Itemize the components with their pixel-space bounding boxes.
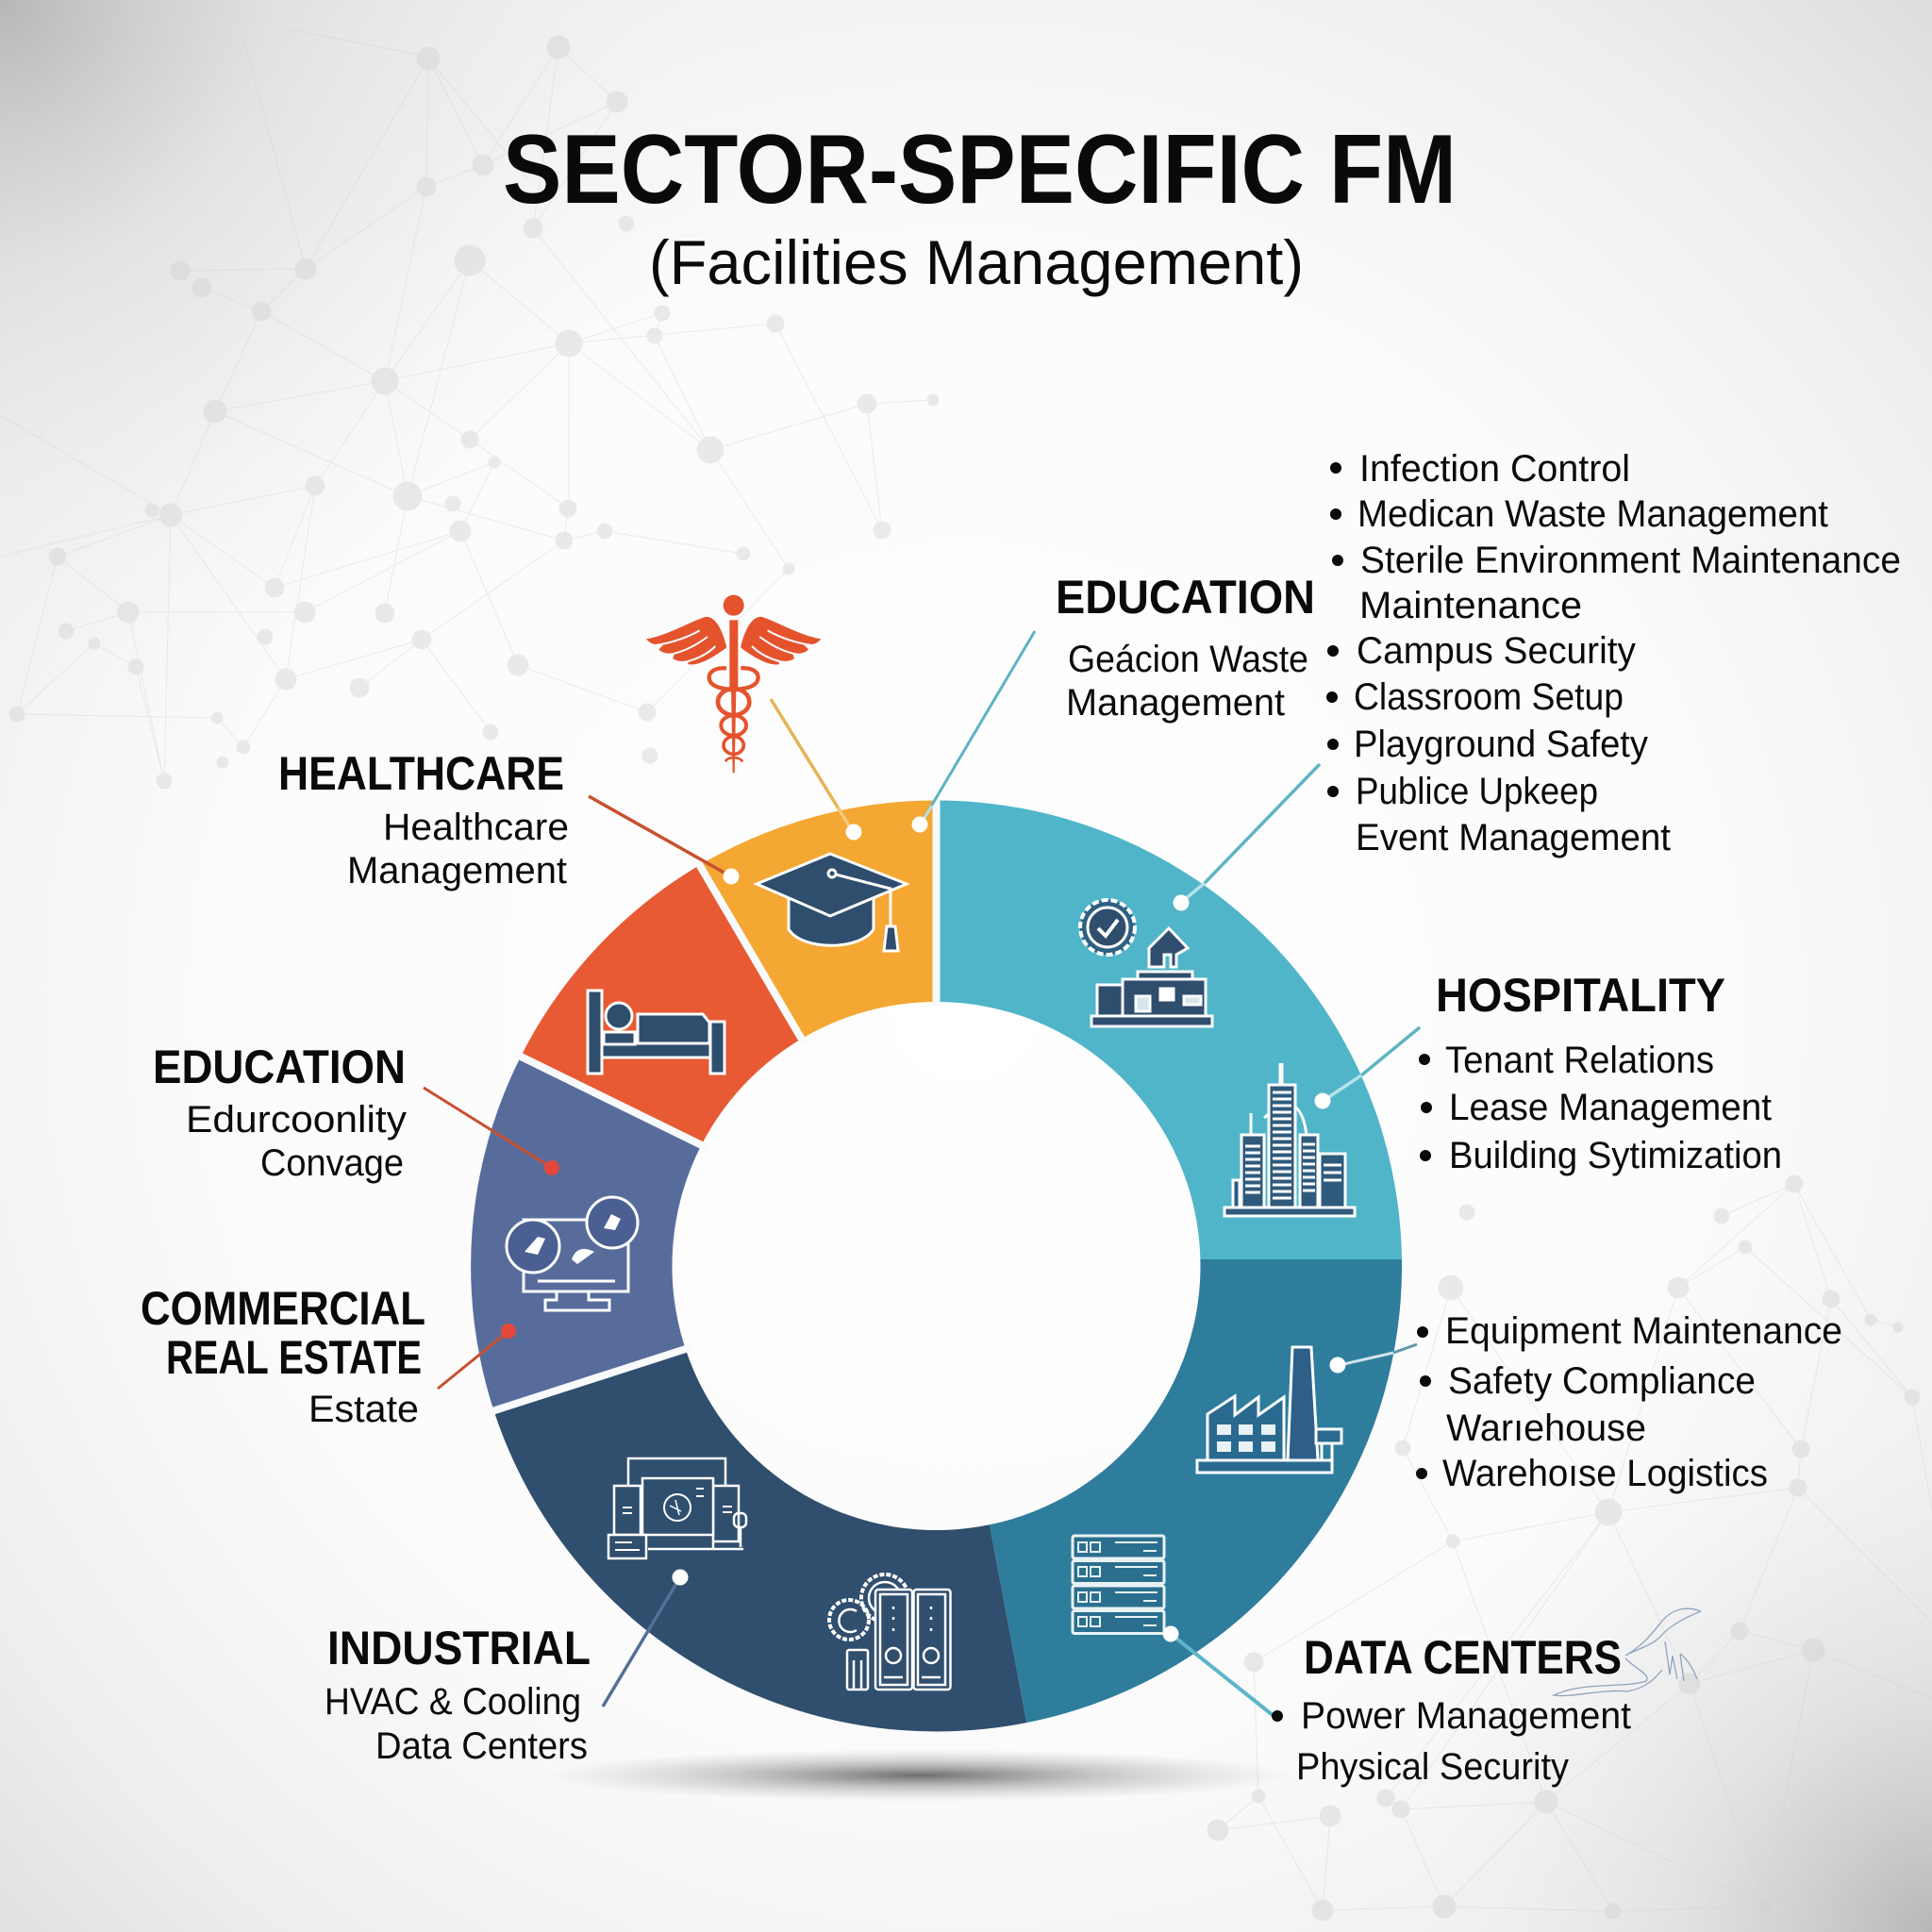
label: data centers: Physical Security bbox=[1296, 1746, 1569, 1788]
list: industrial tasks: Equipment Maintenance bbox=[1445, 1310, 1842, 1352]
label: healthcare bbox=[278, 747, 569, 891]
list: healthcare and education tasks: Infection Control bbox=[1359, 448, 1630, 490]
label: healthcare: HEALTHCARE bbox=[278, 747, 564, 800]
leader: data centers bbox=[1162, 1626, 1277, 1719]
list: industrial tasks bbox=[1416, 1310, 1842, 1494]
label: healthcare: Management bbox=[347, 850, 567, 891]
label: education top bbox=[1056, 571, 1315, 724]
icon: graduation cap bbox=[757, 854, 907, 951]
list: healthcare and education tasks bbox=[1326, 448, 1901, 858]
icon: city skyline bbox=[1224, 1063, 1355, 1216]
label: healthcare: Healthcare bbox=[383, 807, 569, 848]
label: data centers: DATA CENTERS bbox=[1304, 1631, 1622, 1684]
leader: top education bbox=[911, 631, 1035, 832]
list: healthcare and education tasks: Publice Upkeep bbox=[1356, 771, 1598, 812]
segment: orange bbox=[700, 800, 936, 1039]
leader: healthcare bbox=[589, 796, 740, 885]
label: industrial: HVAC & Cooling bbox=[325, 1681, 581, 1723]
label: education top: Management bbox=[1066, 682, 1285, 724]
list: healthcare and education tasks: Maintenance bbox=[1359, 585, 1582, 626]
decorative sketch near data centers bbox=[1554, 1608, 1701, 1696]
label: hospitality: Lease Management bbox=[1449, 1087, 1772, 1128]
label: industrial: INDUSTRIAL bbox=[327, 1622, 591, 1674]
list: healthcare and education tasks: Event Management bbox=[1356, 817, 1671, 858]
donut chart bbox=[471, 796, 1402, 1731]
icon: HVAC units bbox=[608, 1458, 746, 1558]
label: commercial real estate: REAL ESTATE bbox=[166, 1331, 422, 1384]
icon: factory bbox=[1197, 1347, 1341, 1473]
label: data centers bbox=[1272, 1631, 1631, 1788]
segment: navy bbox=[494, 1349, 1026, 1731]
label: commercial real estate bbox=[141, 1282, 425, 1430]
network pattern: top left bbox=[0, 28, 939, 789]
leader: equipment bbox=[1330, 1344, 1417, 1374]
label: commercial real estate: Estate bbox=[308, 1389, 419, 1430]
leader: commercial bbox=[438, 1324, 516, 1389]
list: healthcare and education tasks: Playground Safety bbox=[1354, 724, 1648, 765]
label: hospitality bbox=[1419, 969, 1782, 1176]
subtitle: (Facilities Management) bbox=[649, 227, 1304, 297]
label: data centers: Power Management bbox=[1301, 1695, 1631, 1737]
icon: server rack bbox=[1073, 1536, 1164, 1634]
label: industrial: Data Centers bbox=[375, 1725, 588, 1767]
label: commercial real estate: COMMERCIAL bbox=[141, 1282, 425, 1335]
label: education left bbox=[153, 1041, 407, 1184]
list: healthcare and education tasks: Classroom Setup bbox=[1354, 676, 1624, 718]
network pattern: bottom right bbox=[1208, 1175, 1932, 1921]
leader: industrial bbox=[603, 1570, 689, 1707]
label: education top: EDUCATION bbox=[1056, 571, 1315, 624]
label: education left: Edurcoonlity bbox=[186, 1099, 407, 1141]
segment: dark teal bbox=[990, 1259, 1402, 1723]
label: education left: EDUCATION bbox=[153, 1041, 406, 1093]
label: hospitality: HOSPITALITY bbox=[1436, 969, 1725, 1022]
segment: light teal bbox=[936, 800, 1402, 1259]
segment: red bbox=[521, 865, 801, 1145]
segment: slate blue bbox=[471, 1057, 702, 1411]
icon: caduceus bbox=[646, 595, 821, 773]
list: industrial tasks: Safety Compliance bbox=[1448, 1360, 1756, 1402]
ground shadow bbox=[542, 1749, 1297, 1802]
icon: hospital bed bbox=[588, 991, 724, 1074]
list: industrial tasks: Warıehouse bbox=[1446, 1407, 1646, 1449]
list: healthcare and education tasks: Sterile Environment Maintenance bbox=[1360, 540, 1901, 581]
leader: caduceus bbox=[771, 699, 862, 840]
leader: left education bbox=[424, 1088, 559, 1175]
icon: gears and servers bbox=[829, 1574, 951, 1690]
leader: hospitality bbox=[1315, 1027, 1420, 1109]
label: hospitality: Tenant Relations bbox=[1445, 1040, 1714, 1081]
icon: badge and building bbox=[1080, 900, 1212, 1026]
icon: monitor bbox=[507, 1197, 638, 1310]
label: education left: Convage bbox=[260, 1142, 404, 1184]
label: hospitality: Building Sytimization bbox=[1449, 1135, 1782, 1176]
label: industrial bbox=[325, 1622, 591, 1767]
leader: teal list bbox=[1174, 764, 1320, 911]
callout lines and dots bbox=[424, 631, 1420, 1719]
title: SECTOR-SPECIFIC FM bbox=[503, 115, 1457, 225]
list: healthcare and education tasks: Campus Security bbox=[1357, 630, 1636, 672]
label: education top: Geácion Waste bbox=[1068, 639, 1308, 680]
list: industrial tasks: Warehoıse Logistics bbox=[1442, 1453, 1768, 1494]
list: healthcare and education tasks: Medican Waste Management bbox=[1357, 493, 1828, 535]
